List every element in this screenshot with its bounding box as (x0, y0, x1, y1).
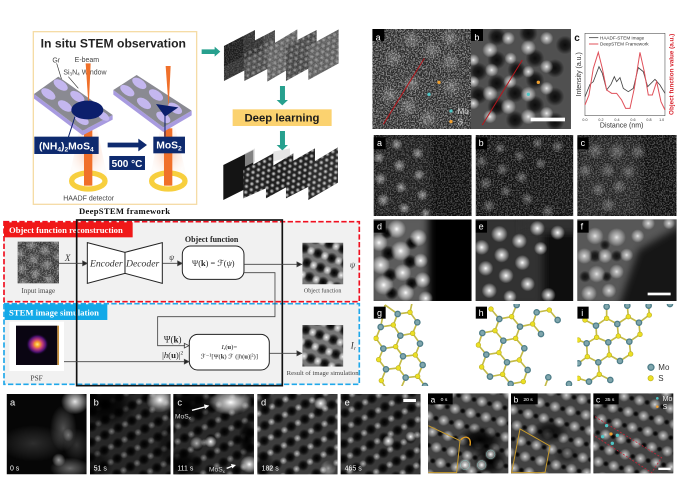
frame c 111 s (173, 394, 254, 474)
raw image b: b (479, 138, 484, 148)
label: h(u) squared: 2 (181, 351, 184, 357)
label: 500 °C (109, 156, 145, 170)
label: MoS2: 2 (178, 146, 182, 153)
atomic model h: h (479, 308, 484, 318)
label: I_r: I (351, 341, 354, 351)
label: h(u) squared: |h(u)| (162, 350, 181, 360)
micrograph b (471, 29, 571, 129)
object function f (577, 219, 677, 301)
image: input image (18, 242, 59, 283)
label: MoS2: MoS (156, 141, 178, 152)
frame b 20 s: 20 s (523, 397, 533, 403)
box: object function formula (182, 246, 244, 279)
object function e (476, 219, 574, 301)
section: STEM image simulation (4, 304, 359, 384)
chart: intensity profile: DeepSTEM Framework (600, 42, 649, 47)
raw image a: a (377, 138, 382, 148)
panel: micrograph and atomic model grid (368, 135, 678, 389)
label: Psi(k): Ψ(k) (164, 335, 181, 345)
heading: In situ STEM observation: In situ STEM observation (41, 37, 186, 50)
arrow: to image stack (202, 47, 220, 57)
frame a 0 s (428, 393, 508, 474)
frame c 111 s: c (177, 398, 182, 408)
arrow: to simulation image (269, 351, 302, 356)
label: (NH4)2MoS4: 4 (57, 146, 61, 153)
frame a 0 s: 0 s (10, 465, 20, 472)
labels: substrate materials: Gr (52, 57, 61, 64)
labels: substrate materials: 4 (77, 72, 80, 77)
atomic model g (374, 304, 428, 386)
arrow: down to deep learning (277, 86, 288, 105)
connector: object function to simulation (158, 273, 275, 348)
label: psi output: ψ (350, 259, 356, 269)
frame c 35 s: c (596, 394, 600, 404)
box: Deep learning: Deep learning (245, 113, 320, 125)
frame d 182 s: 182 s (262, 465, 279, 472)
object function d: d (377, 221, 382, 231)
micrograph a: Mo (458, 107, 469, 116)
frame b 51 s: 51 s (94, 465, 107, 472)
raw image c (577, 135, 677, 216)
box: image simulation formula: r (224, 346, 226, 351)
MoS2 flake (156, 66, 178, 137)
image: simulation result (302, 325, 344, 367)
label: psi: ψ (169, 253, 175, 262)
frame a 0 s: a (10, 398, 16, 408)
frame c 35 s: S (663, 404, 668, 411)
frame b 20 s (511, 393, 591, 474)
panel: DeepSTEM framework diagram (4, 220, 359, 386)
frame c 111 s: x (223, 469, 226, 474)
atomic model i: i (581, 308, 583, 318)
precursor blob (68, 63, 103, 137)
caption: DeepSTEM framework: DeepSTEM framework (79, 206, 170, 216)
frame a 0 s: 0 s (441, 397, 448, 403)
panel: deep learning pipeline (202, 29, 339, 200)
chart: intensity profile: HAADF-STEM image (600, 35, 645, 40)
atomic model i (577, 304, 674, 385)
labels: substrate materials: N (72, 69, 77, 76)
arrow: heating (108, 139, 147, 151)
frame c 35 s: Mo (663, 396, 672, 403)
labels: substrate materials: Si (63, 69, 70, 76)
label: (NH4)2MoS4 (34, 137, 99, 154)
frame c 111 s: MoS (175, 413, 189, 420)
label: X: X (64, 253, 71, 263)
frame c 111 s: MoS (209, 467, 223, 474)
frame e 465 s: 465 s (345, 465, 362, 472)
frame c 35 s: 35 s (605, 397, 615, 403)
chart: intensity profile: 0.6 (630, 118, 636, 122)
micrograph a: a (376, 32, 381, 42)
chart: intensity profile: c (574, 33, 580, 44)
arrow: down to output (277, 131, 288, 150)
beam and detector: left (69, 127, 107, 189)
object function e: e (479, 221, 484, 231)
frame d 182 s (257, 394, 338, 474)
frame c 111 s: 111 s (177, 465, 194, 472)
chart: intensity profile: 0.4 (614, 118, 620, 122)
label: input image: Input image (22, 287, 55, 295)
panel: time-lapse micrographs 0 to 35 s (428, 393, 673, 477)
chart: intensity profile: 0.0 (582, 118, 588, 122)
box: object function formula: Ψ(k) = ℱ(ψ) (192, 259, 235, 268)
section: STEM image simulation: STEM image simulation (9, 307, 99, 317)
panel: time-lapse micrographs 0 to 465 s (0, 382, 421, 482)
object function d (374, 219, 472, 301)
decoder (125, 243, 162, 283)
labels: substrate materials: E-beam (75, 57, 99, 64)
label: MoS2 (153, 137, 185, 153)
box: Deep learning (233, 109, 332, 126)
raw image c: c (581, 138, 586, 148)
heading: object function: Object function (185, 235, 239, 244)
label: I_r: r (354, 346, 357, 352)
label: (NH4)2MoS4: MoS (68, 141, 90, 152)
frame e 465 s (340, 394, 421, 474)
framework outline (77, 220, 282, 386)
atomic model g: g (377, 308, 382, 318)
chart: intensity profile: Intensity (a.u.) (576, 52, 583, 96)
panel: in situ STEM observation schematic (33, 32, 197, 204)
label: PSF: PSF (31, 373, 43, 382)
raw image a (374, 135, 472, 216)
atomic model i: S (658, 374, 664, 383)
object function f: f (581, 221, 584, 231)
labels: substrate materials: Window (80, 69, 108, 76)
frame e 465 s: e (345, 398, 350, 408)
chart: intensity profile: Object function value (a.u.) (669, 34, 676, 115)
image stack: input frames (224, 29, 339, 82)
label: result caption: Result of image simulation (287, 370, 359, 377)
micrograph a (372, 29, 471, 129)
section: object function reconstruction: Object function reconstruction (9, 225, 123, 235)
substrate plate: left (34, 77, 113, 135)
arrow: to object function image (244, 262, 302, 267)
chart: intensity profile: 1.0 (659, 118, 664, 122)
frame d 182 s: d (261, 398, 266, 408)
frame c 111 s: x (189, 416, 192, 421)
atomic model h (476, 304, 572, 386)
panel: top micrographs and profile (372, 24, 676, 131)
label: HAADF detector: HAADF detector (63, 196, 115, 203)
image stack: output frames (223, 147, 338, 200)
arrow: input to encoder (59, 261, 87, 266)
arrow: decoder to object function (162, 261, 182, 266)
frame b 51 s (90, 394, 171, 474)
PSF plot (9, 322, 64, 371)
raw image b (476, 135, 574, 216)
box: image simulation formula: I (221, 344, 225, 351)
micrograph a: S (458, 118, 463, 127)
beam and detector: right (150, 127, 187, 189)
label: object function caption: Object function (304, 287, 341, 294)
decoder: Decoder (125, 258, 160, 269)
box: image simulation formula: ( (225, 344, 227, 351)
frame a 0 s: a (431, 394, 436, 404)
section: object function reconstruction (4, 222, 359, 302)
chart: intensity profile (574, 33, 676, 130)
label: (NH4)2MoS4: ) (61, 141, 64, 152)
frame a 0 s (6, 394, 87, 474)
label: (NH4)2MoS4: (NH (39, 141, 57, 152)
box: image simulation formula (189, 334, 269, 370)
encoder (87, 243, 125, 283)
chart: intensity profile: 0.8 (646, 118, 652, 122)
label: (NH4)2MoS4: 2 (64, 146, 68, 153)
labels: substrate materials: 3 (70, 72, 73, 77)
chart: intensity profile: Distance (nm) (600, 123, 643, 130)
image: object function (302, 242, 344, 284)
encoder: Encoder (89, 258, 123, 269)
label: 500 °C: 500 °C (112, 159, 142, 170)
frame b 51 s: b (94, 398, 99, 408)
atomic model i: Mo (658, 363, 670, 372)
labels: substrate materials (52, 57, 108, 88)
substrate plate: right (113, 75, 192, 132)
arrow: PSF to simulation (64, 359, 189, 364)
chart: intensity profile: 0.2 (598, 118, 604, 122)
label: (NH4)2MoS4: 4 (90, 146, 94, 153)
frame c 35 s (593, 393, 674, 474)
frame b 20 s: b (514, 394, 519, 404)
box: image simulation formula: ℱ⁻¹[Ψ(k) ℱ (|h(u)|²)] (201, 353, 258, 361)
micrograph b: b (474, 32, 479, 42)
box: image simulation formula: u)= (227, 344, 237, 351)
